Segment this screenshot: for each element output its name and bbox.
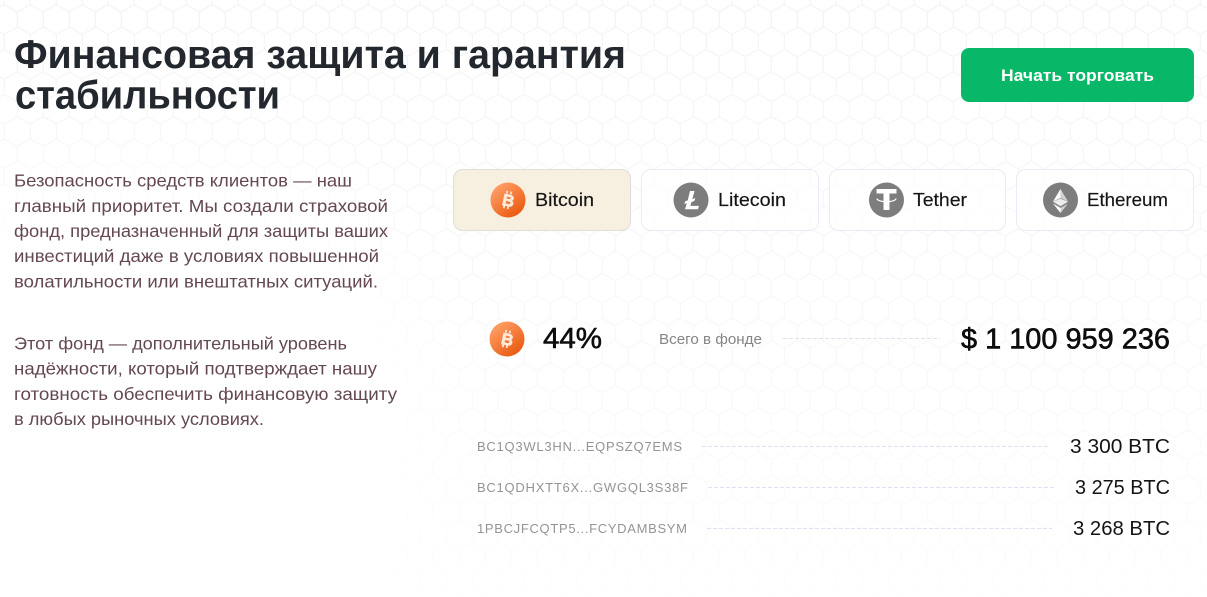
text block: first paragraph: главный приоритет. Мы создали страховой xyxy=(14,196,388,216)
title: Финансовая защита и гарантия xyxy=(14,33,626,77)
tab: Bitcoin xyxy=(454,170,630,230)
icon: bitcoin share: B xyxy=(500,330,515,350)
text block: first paragraph: Безопасность средств клиентов — наш xyxy=(14,171,352,191)
icon: bitcoin share xyxy=(490,322,524,356)
icon: litecoin xyxy=(674,182,708,218)
button: start trading: Начать торговать xyxy=(1001,66,1154,85)
tab: Bitcoin: Bitcoin xyxy=(535,189,594,210)
tab: Litecoin: Litecoin xyxy=(718,189,786,210)
text block: first paragraph: инвестиций даже в условиях повышенной xyxy=(14,246,379,266)
icon: ethereum xyxy=(1043,182,1078,218)
wallet row 2: 3 275 BTC xyxy=(1075,477,1170,499)
bitcoin share percent: 44% xyxy=(543,323,602,355)
wallet row 1: BC1Q3WL3HN...EQPSZQ7EMS xyxy=(477,439,682,454)
tab: Litecoin xyxy=(642,170,818,230)
text block: second paragraph: в любых рыночных условиях. xyxy=(14,409,264,429)
text block: first paragraph: фонд, предназначенный для защиты ваших xyxy=(14,221,388,241)
wallet row 3: 1PBCJFCQTP5...FCYDAMBSYM xyxy=(477,521,687,536)
wallet row 3 xyxy=(477,518,1170,540)
text block: first paragraph xyxy=(14,171,388,291)
fund summary row xyxy=(490,322,1170,356)
button: start trading xyxy=(961,48,1194,102)
fund total: $ 1 100 959 236 xyxy=(961,324,1170,356)
text block: second paragraph xyxy=(14,334,397,429)
tab: Ethereum: Ethereum xyxy=(1087,189,1168,210)
text block: second paragraph: надёжности, который подтверждает нашу xyxy=(14,359,377,379)
wallet row 1 xyxy=(477,436,1170,458)
text block: second paragraph: Этот фонд — дополнительный уровень xyxy=(14,334,347,354)
text block: first paragraph: волатильности или внештатных ситуаций. xyxy=(14,271,378,291)
text block: second paragraph: готовность обеспечить финансовую защиту xyxy=(14,384,397,404)
icon: tether xyxy=(869,182,904,218)
wallet row 1: 3 300 BTC xyxy=(1070,436,1170,458)
wallet row 2 xyxy=(477,477,1170,499)
title: стабильности xyxy=(15,74,280,118)
fund label: Всего в фонде xyxy=(659,332,762,348)
icon: bitcoin xyxy=(490,182,526,218)
tab: Tether xyxy=(830,170,1006,230)
wallet row 2: BC1QDHXTT6X...GWGQL3S38F xyxy=(477,480,688,495)
icon: bitcoin: B xyxy=(501,191,516,211)
wallet row 3: 3 268 BTC xyxy=(1073,518,1170,540)
tab: Tether: Tether xyxy=(913,189,967,210)
tab: Ethereum xyxy=(1016,170,1194,230)
title xyxy=(14,33,626,118)
